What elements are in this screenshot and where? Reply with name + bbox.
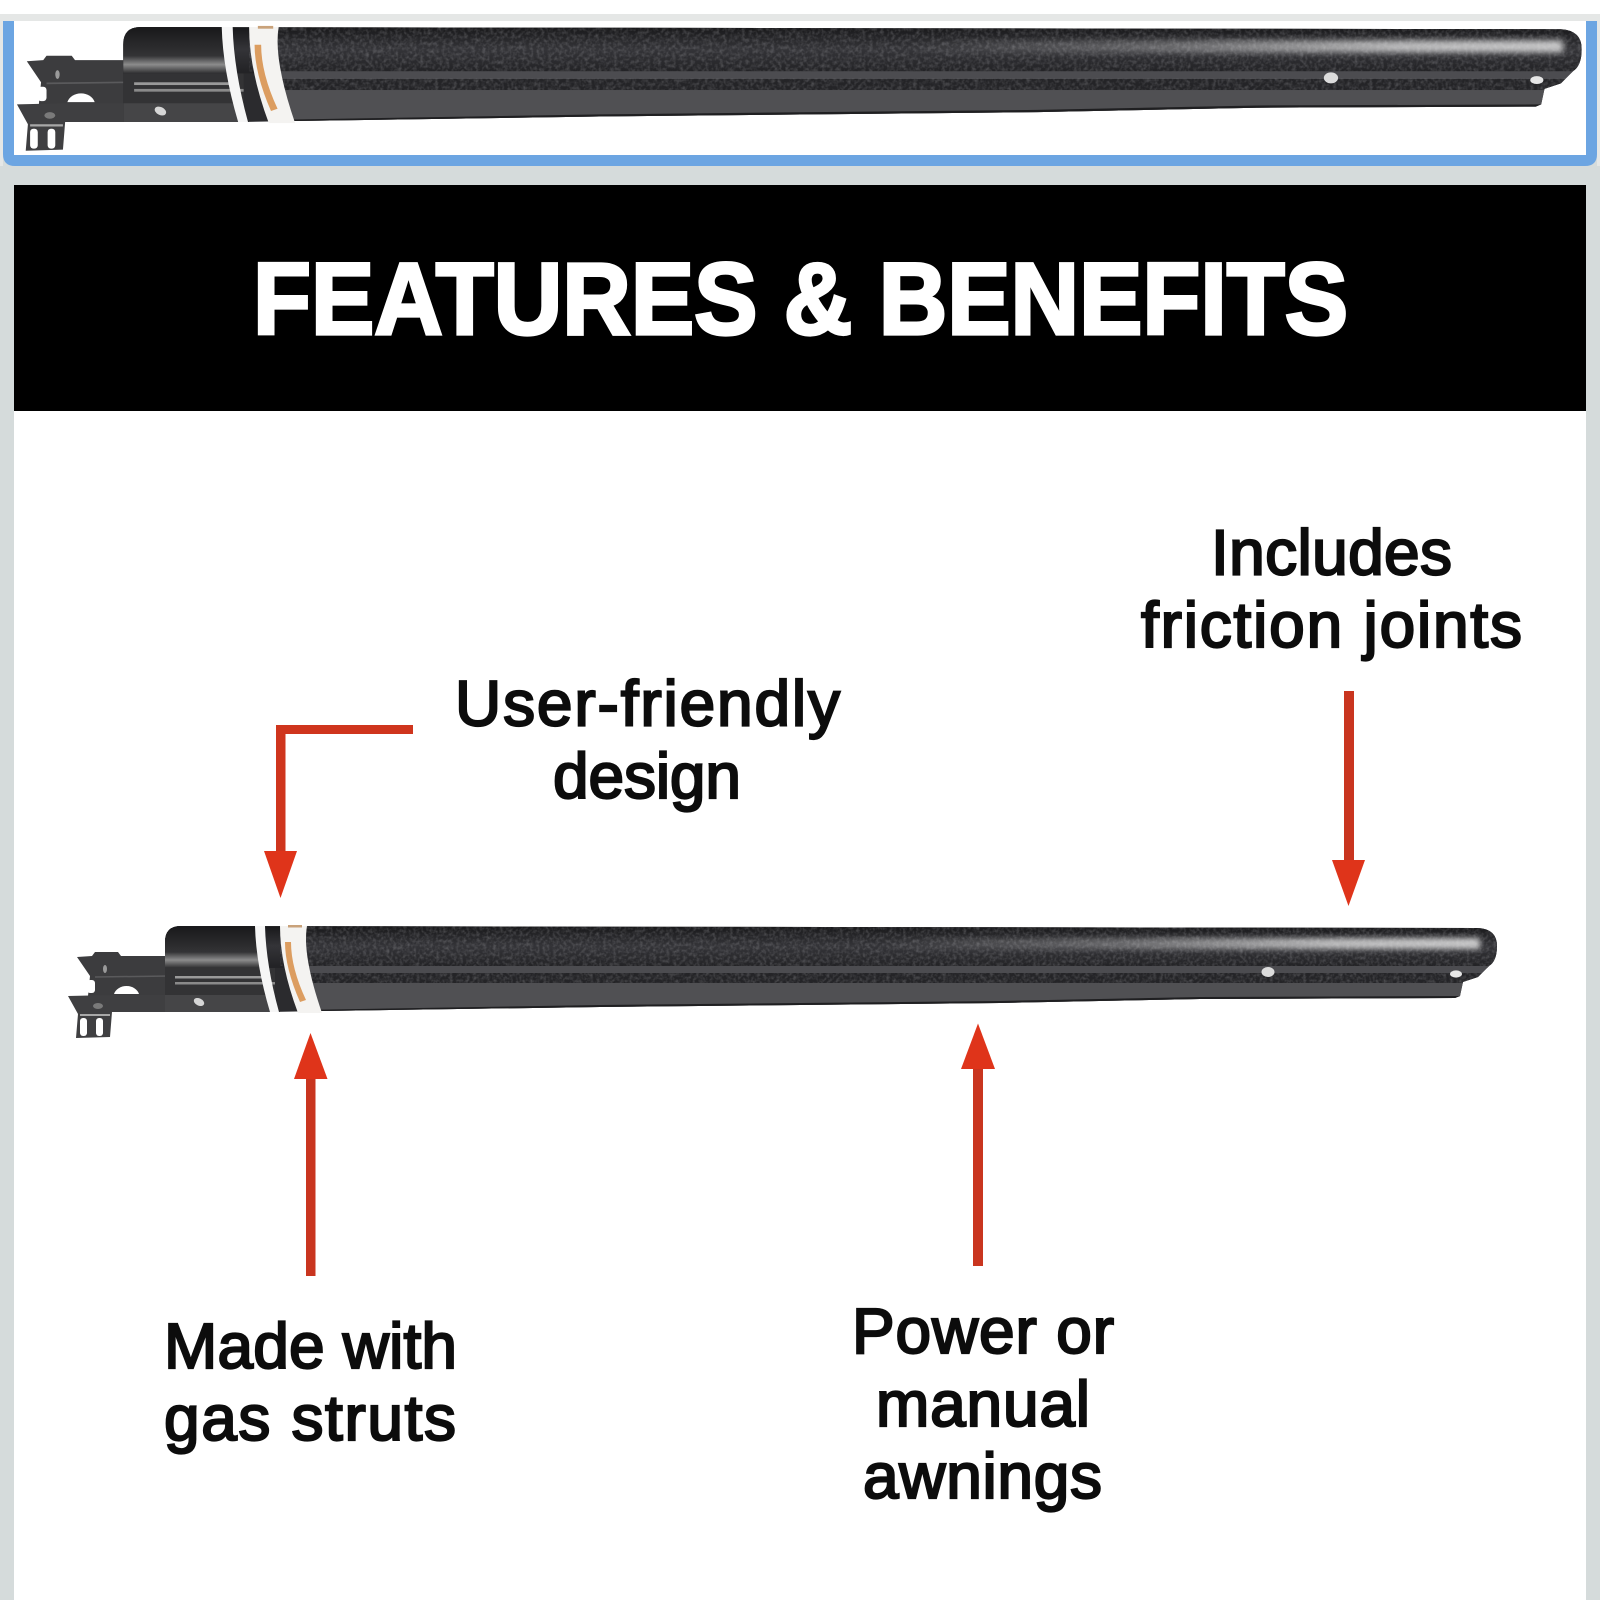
callout: made with gas struts xyxy=(164,1310,457,1454)
callout: user-friendly design xyxy=(455,668,840,812)
panel: product thumbnail xyxy=(0,0,1600,166)
heading banner xyxy=(14,185,1586,411)
image: strut thumbnail xyxy=(17,20,1590,151)
callout: made with gas struts: gas struts xyxy=(164,1382,456,1454)
panel: features diagram xyxy=(14,411,1586,1600)
callout: made with gas struts: Made with xyxy=(164,1310,457,1382)
callout: includes friction joints: Includes xyxy=(1211,516,1452,588)
callout: includes friction joints xyxy=(1141,516,1522,661)
title: FEATURES & BENEFITS xyxy=(253,242,1348,356)
callout: power or manual awnings: manual xyxy=(876,1368,1090,1440)
image: awning strut xyxy=(68,920,1505,1038)
arrow: to gas struts xyxy=(294,1033,328,1276)
arrow: to power or manual xyxy=(961,1024,995,1266)
callout: power or manual awnings: awnings xyxy=(863,1440,1102,1512)
callout: power or manual awnings xyxy=(852,1295,1114,1512)
callout: power or manual awnings: Power or xyxy=(852,1295,1114,1367)
arrow: to user-friendly design xyxy=(264,725,413,898)
arrow: to friction joints xyxy=(1332,691,1365,906)
callout: includes friction joints: friction joints xyxy=(1141,589,1522,661)
callout: user-friendly design: User-friendly xyxy=(455,668,840,740)
callout: user-friendly design: design xyxy=(553,740,741,812)
